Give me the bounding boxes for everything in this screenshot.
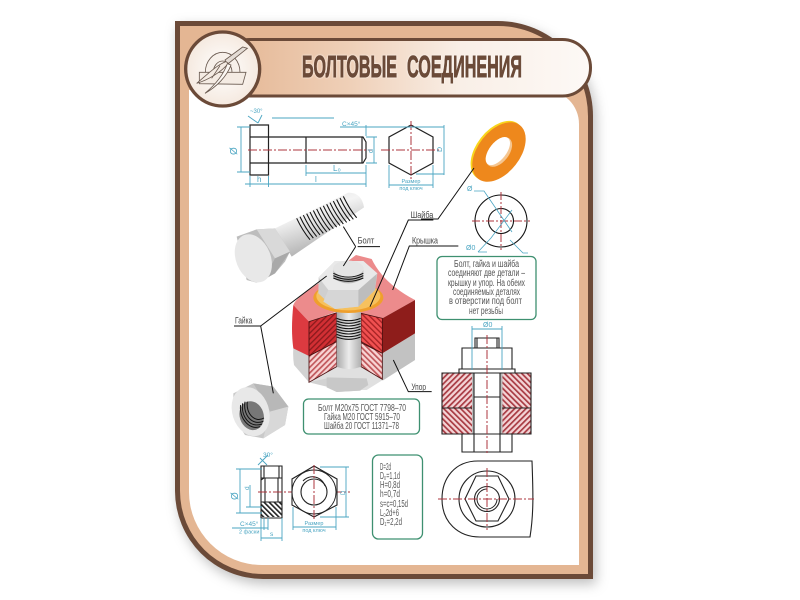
top drawing: bolt head end view: D	[437, 147, 444, 152]
washer leader line	[421, 168, 474, 219]
top drawing: bolt head end view	[377, 121, 444, 192]
3D assembly cutaway	[292, 255, 415, 392]
text box: connection description: соединяемых деталях	[453, 287, 520, 298]
3D bolt	[228, 193, 364, 288]
text box: formulas: s=c=0,15d	[380, 499, 408, 510]
label: Упор: Упор	[411, 382, 426, 392]
text box: connection description	[437, 256, 536, 320]
title: СОЕДИНЕНИЯ	[407, 49, 522, 84]
dimension labels: ~30°	[250, 109, 263, 115]
label: wrench size: Размер	[305, 521, 323, 527]
label: Болт	[343, 227, 380, 266]
panel: board frame	[175, 21, 593, 579]
washer drawing	[466, 186, 530, 253]
nut end view	[292, 465, 349, 534]
washer drawing: Ø0	[466, 245, 475, 252]
bolt shaft in section	[337, 310, 361, 369]
text box: formulas: D=2d	[380, 462, 391, 473]
label: Шайба	[370, 210, 433, 307]
label: wrench size	[302, 521, 326, 534]
dimension labels: C×45°	[342, 120, 361, 128]
header bar	[222, 40, 590, 96]
3D nut	[226, 382, 288, 441]
section drawing of bolted joint	[442, 322, 531, 455]
label: Шайба: Шайба	[411, 210, 433, 220]
nut dimension labels: C×45°	[240, 520, 259, 528]
nut in assembly	[318, 261, 377, 309]
label: wrench size: под ключ	[399, 186, 423, 192]
dimension labels: d	[368, 149, 375, 153]
text box: formulas: D₁=2,2d	[380, 517, 402, 528]
nut dimension labels: d	[244, 486, 251, 490]
label: wrench size: под ключ	[302, 528, 326, 534]
text box: fastener standards: Гайка М20 ГОСТ 5915–70	[324, 412, 400, 423]
dimension labels: L₀	[333, 164, 341, 173]
text box: fastener standards	[304, 399, 420, 434]
text box: connection description: в отверстии под болт	[449, 295, 522, 307]
nut end view: D	[341, 490, 347, 495]
nut dimension labels: s	[270, 531, 274, 538]
label: wrench size	[399, 179, 423, 192]
dimension labels: l	[315, 175, 317, 184]
washer in assembly	[313, 282, 383, 313]
text box: formulas: D₀=1,1d	[380, 471, 400, 482]
text box: formulas: L₀2d+6	[380, 508, 399, 519]
title: БОЛТОВЫЕ	[302, 49, 397, 84]
washer illustration	[460, 111, 536, 192]
text box: formulas	[372, 455, 422, 539]
dimension labels: h	[257, 175, 261, 184]
nut side view	[230, 451, 350, 541]
red upper block (крышка)	[292, 255, 415, 356]
label: Гайка: Гайка	[235, 315, 252, 325]
icon: drafting tools emblem	[186, 32, 260, 106]
label: Крышка	[393, 235, 458, 290]
text box: formulas: h=0,7d	[380, 489, 400, 500]
dimension labels: Ø	[229, 147, 240, 155]
text box: connection description: соединяют две детали –	[448, 268, 525, 279]
text box: fastener standards: Болт М20х75 ГОСТ 7798–70	[318, 403, 406, 414]
nut dimension labels: 2 фаски	[239, 530, 259, 536]
gray lower block (упор)	[293, 333, 415, 392]
label: Упор	[393, 360, 432, 392]
label: Крышка: Крышка	[412, 235, 438, 245]
washer drawing: Ø	[467, 186, 473, 193]
text box: connection description: нет резьбы	[469, 305, 503, 317]
nut dimension labels: 30°	[263, 451, 273, 459]
text box: connection description: крышку и упор. На обеих	[448, 277, 525, 289]
label: Гайка	[234, 276, 327, 393]
leader lines and part labels	[234, 210, 458, 393]
top drawing: bolt side view	[229, 109, 377, 187]
text box: formulas: H=0,8d	[380, 480, 400, 491]
section hatching	[309, 313, 382, 382]
label: Болт: Болт	[358, 235, 374, 245]
plan view of bolted joint	[438, 461, 534, 537]
label: wrench size: Размер	[402, 179, 420, 185]
dimension label: Ø0	[483, 322, 492, 329]
text box: connection description: Болт, гайка и шайба	[454, 258, 519, 270]
nut dimension labels: Ø	[230, 492, 241, 500]
dimension labels	[229, 109, 375, 184]
text box: fastener standards: Шайба 20 ГОСТ 11371–78	[324, 420, 399, 432]
nut dimension labels	[230, 451, 274, 538]
